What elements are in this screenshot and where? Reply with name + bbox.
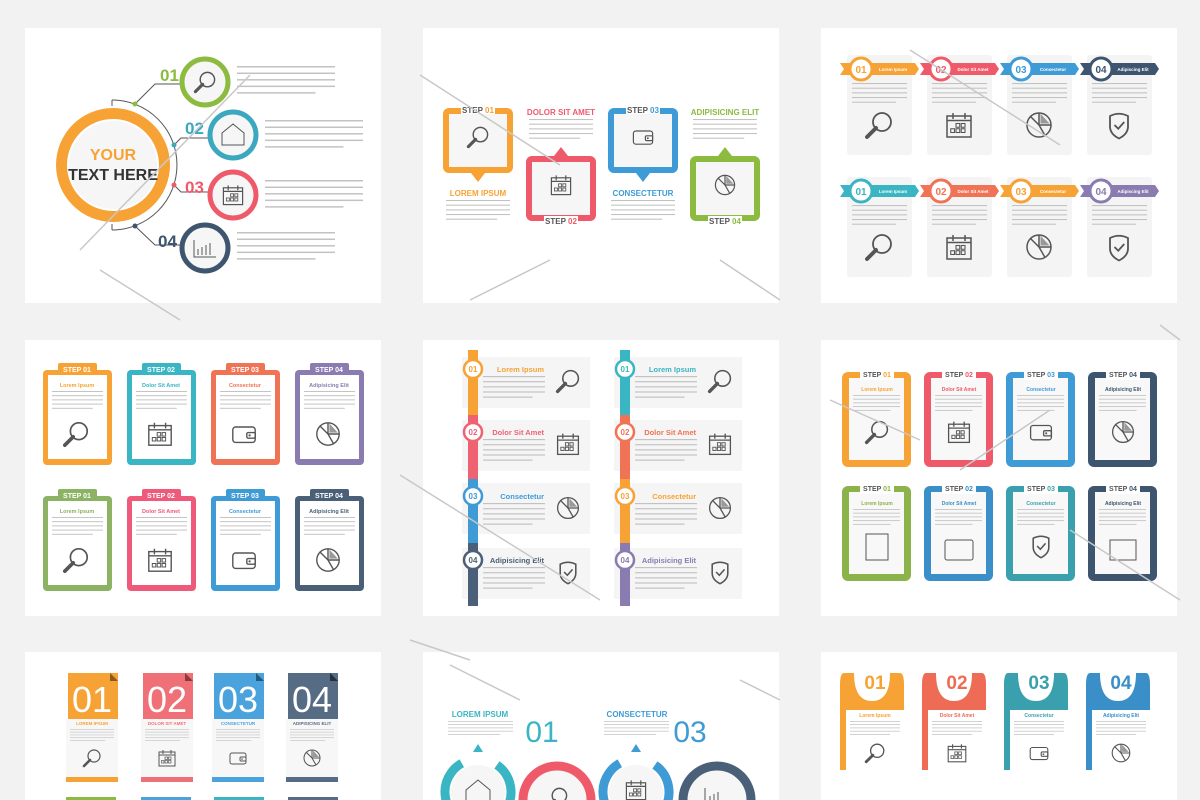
row 2 cards: 02 <box>935 187 947 198</box>
step 01: 01 <box>160 66 179 85</box>
row 1 cards: Lorem Ipsum <box>879 67 907 72</box>
step 03 <box>185 172 363 218</box>
row 1 cards: 04 <box>1095 65 1107 76</box>
row 1: Lorem Ipsum <box>861 387 893 393</box>
row 1: Adipisicing Elit <box>1105 387 1141 393</box>
row 2 frames: Lorem Ipsum <box>60 509 94 515</box>
panel: arched number cards <box>821 652 1177 800</box>
step 02 <box>185 112 363 158</box>
row 2 frames: Consectetur <box>229 509 262 515</box>
panel: circle diagram <box>25 28 381 303</box>
step 02: 02 <box>185 119 204 138</box>
row 2: Lorem Ipsum <box>861 501 893 507</box>
column 2: Consectetur <box>652 492 696 501</box>
step 2: STEP 02 <box>545 217 577 226</box>
row 2 cards: Adipiscing Elit <box>1117 189 1149 194</box>
main circle <box>56 108 170 222</box>
row 1: STEP 02 <box>945 372 973 379</box>
row 2 frames <box>43 489 364 591</box>
step 3 <box>608 104 678 220</box>
step 4 <box>690 108 760 226</box>
row 1 frames: STEP 01 <box>63 367 91 374</box>
row 1 frames: STEP 04 <box>315 367 343 374</box>
panel: circle rings: CONSECTETUR <box>607 710 668 719</box>
panel: ribbon cards <box>821 28 1177 303</box>
row 2 cards: 01 <box>855 187 867 198</box>
row 2 frames: STEP 02 <box>147 493 175 500</box>
row 1 frames <box>43 363 364 465</box>
row 1 cards: 01 <box>855 65 867 76</box>
panel: step squares <box>423 28 779 303</box>
panel: arched number cards: Consectetur <box>1024 713 1054 719</box>
row 2: Consectetur <box>1026 501 1056 507</box>
panel: number tabs: LOREM IPSUM <box>76 721 108 726</box>
row 2 <box>842 483 1157 581</box>
row 2 cards: Consectetur <box>1040 189 1066 194</box>
step 1 <box>443 104 513 220</box>
step 1: STEP 01 <box>462 106 494 115</box>
column 2 <box>614 350 742 606</box>
row 2 frames: STEP 01 <box>63 493 91 500</box>
row 1 frames: Dolor Sit Amet <box>142 383 180 389</box>
step 4: ADIPISICING ELIT <box>691 108 759 117</box>
row 1: STEP 01 <box>863 372 891 379</box>
column 1: Adipisicing Elit <box>490 556 545 565</box>
row 1: Consectetur <box>1026 387 1056 393</box>
row 1 frames: STEP 02 <box>147 367 175 374</box>
panel: arched number cards: Adipisicing Elit <box>1103 713 1139 719</box>
row 2: STEP 01 <box>863 486 891 493</box>
panel: number tabs <box>25 652 381 800</box>
row 1 frames: STEP 03 <box>231 367 259 374</box>
panel: framed step cards <box>821 340 1177 616</box>
row 2 cards: 03 <box>1015 187 1027 198</box>
step 3: CONSECTETUR <box>613 189 674 198</box>
column 2: 02 <box>621 428 630 437</box>
column 2: Adipisicing Elit <box>642 556 697 565</box>
column 2: Dolor Sit Amet <box>644 428 696 437</box>
step 01 <box>160 59 335 105</box>
step 2: DOLOR SIT AMET <box>527 108 595 117</box>
step 1: LOREM IPSUM <box>450 189 507 198</box>
row 1 cards: 03 <box>1015 65 1027 76</box>
row 1 frames: Adipisicing Elit <box>309 383 349 389</box>
step 03: 03 <box>185 178 204 197</box>
row 2 frames: STEP 03 <box>231 493 259 500</box>
column 1: 01 <box>469 365 478 374</box>
panel: number tabs: 04 <box>292 679 332 720</box>
row 2: Dolor Sit Amet <box>942 501 977 507</box>
connector arc <box>112 84 209 245</box>
step 04 <box>158 225 335 271</box>
column 2: 01 <box>621 365 630 374</box>
row 2: Adipisicing Elit <box>1105 501 1141 507</box>
panel: arched number cards: 03 <box>1028 673 1050 694</box>
panel: arched number cards: 01 <box>864 673 886 694</box>
row 2 frames: Adipisicing Elit <box>309 509 349 515</box>
row 1: Dolor Sit Amet <box>942 387 977 393</box>
panel: circle rings <box>423 652 779 800</box>
column 2: 03 <box>621 492 630 501</box>
panel: circle rings: 03 <box>673 716 707 749</box>
panel: arched number cards: Lorem Ipsum <box>859 713 891 719</box>
panel: arched number cards: 02 <box>946 673 968 694</box>
column 2: Lorem Ipsum <box>649 365 696 374</box>
panel: circle rings: LOREM IPSUM <box>452 710 509 719</box>
step 3: STEP 03 <box>627 106 659 115</box>
row 2 frames: Dolor Sit Amet <box>142 509 180 515</box>
row 2 frames: STEP 04 <box>315 493 343 500</box>
row 2: STEP 03 <box>1027 486 1055 493</box>
row 2 cards: 04 <box>1095 187 1107 198</box>
column 1 <box>462 350 590 606</box>
panel: number tabs: DOLOR SIT AMET <box>148 721 186 726</box>
row 1 cards: Dolor Sit Amet <box>957 67 989 72</box>
row 2: STEP 04 <box>1109 486 1137 493</box>
column 1: Dolor Sit Amet <box>492 428 544 437</box>
row 2 cards: Dolor Sit Amet <box>957 189 989 194</box>
column 2: 04 <box>621 556 630 565</box>
panel: number tabs: 03 <box>218 679 258 720</box>
main circle: YOUR <box>90 147 137 164</box>
row 2 cards <box>840 177 1159 277</box>
step 2 <box>526 108 596 226</box>
step 4: STEP 04 <box>709 217 741 226</box>
row 1 cards: 02 <box>935 65 947 76</box>
panel: arched number cards: Dolor Sit Amet <box>940 713 975 719</box>
main circle: TEXT HERE <box>68 167 158 184</box>
row 1 frames: Lorem Ipsum <box>60 383 94 389</box>
row 1 cards: Consectetur <box>1040 67 1066 72</box>
row 2: STEP 02 <box>945 486 973 493</box>
panel: step frames grid <box>25 340 381 616</box>
row 1: STEP 04 <box>1109 372 1137 379</box>
column 1: Lorem Ipsum <box>497 365 544 374</box>
row 1 cards <box>840 55 1159 155</box>
panel: vertical timelines <box>423 340 779 616</box>
panel: arched number cards: 04 <box>1110 673 1132 694</box>
column 1: 04 <box>469 556 478 565</box>
panel: circle rings: 01 <box>525 716 559 749</box>
panel: number tabs: ADIPISICING ELIT <box>293 721 331 726</box>
row 1 cards: Adipiscing Elit <box>1117 67 1149 72</box>
row 1: STEP 03 <box>1027 372 1055 379</box>
row 2 cards: Lorem Ipsum <box>879 189 907 194</box>
panel: number tabs: 02 <box>147 679 187 720</box>
column 1: Consectetur <box>500 492 544 501</box>
column 1: 03 <box>469 492 478 501</box>
panel: number tabs: 01 <box>72 679 112 720</box>
column 1: 02 <box>469 428 478 437</box>
row 1 frames: Consectetur <box>229 383 262 389</box>
row 1 <box>842 369 1157 467</box>
panel: number tabs: CONSECTETUR <box>221 721 256 726</box>
step 04: 04 <box>158 232 177 251</box>
